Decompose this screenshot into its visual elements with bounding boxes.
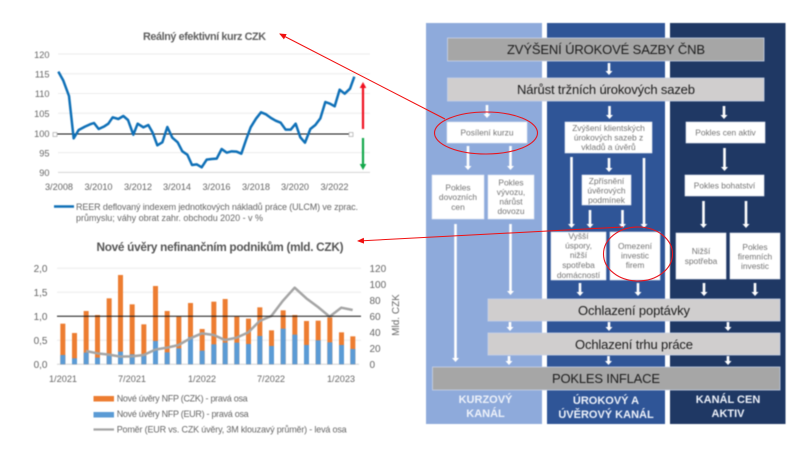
box: demand cooling: [488, 299, 780, 321]
box: policy rate increase: ZVÝŠENÍ ÚROKOVÉ SAZBY ČNB: [507, 42, 705, 57]
gridlines and y axis labels: 90: [39, 168, 50, 178]
box: tighter credit: podmínek: [588, 195, 626, 205]
box: lower consumption: Nižší: [692, 246, 711, 256]
box: labour market cooling: Ochlazení trhu práce: [575, 337, 693, 352]
x axis labels: 3/2012: [124, 182, 152, 192]
box: household savings: domácností: [557, 270, 601, 280]
x axis labels: 3/2010: [84, 182, 113, 192]
box: lower consumption: [676, 233, 726, 279]
box: asset prices: Pokles cen aktiv: [695, 128, 757, 138]
box: market rates growth: Nárůst tržních úrokových sazeb: [517, 82, 695, 97]
label: exchange rate channel: KURZOVÝ: [459, 393, 513, 406]
box: client rates: úrokových sazeb z: [574, 132, 643, 142]
box: client rates: Zvýšení klientských: [572, 123, 645, 133]
gridlines and axis labels: 1,5: [34, 288, 48, 299]
chart: new loans to non-financial corporations: [34, 240, 402, 434]
gridlines and axis labels: 0: [370, 360, 376, 371]
x axis labels: 7/2021: [118, 374, 146, 384]
label: asset channel: KANÁL CEN: [696, 393, 760, 406]
box: asset prices: [686, 122, 765, 143]
box: client rates: vkladů a úvěrů: [581, 142, 636, 152]
up arrow: red: [360, 82, 366, 129]
reference line at 1,0: [57, 315, 361, 317]
box: firm investment: firem: [626, 260, 644, 270]
box: inflation decline: POKLES INFLACE: [552, 371, 660, 386]
box: policy rate increase: [448, 38, 764, 61]
box: household savings: nižší: [570, 250, 588, 260]
box: lower consumption: spotřeba: [685, 256, 718, 266]
down arrow: green: [360, 138, 366, 170]
box: wealth: [685, 175, 764, 196]
arrow: firm investment to loans chart: [358, 227, 623, 241]
box: tighter credit: [582, 175, 631, 205]
box: exports: vývozu,: [497, 187, 525, 197]
gridlines and y axis labels: 95: [39, 148, 50, 158]
panel: asset price channel: [670, 23, 786, 424]
box: household savings: [551, 231, 606, 280]
gridlines and axis labels: 0,0: [34, 360, 48, 371]
blue bars: EUR loans: [60, 329, 355, 364]
x axis labels: 1/2022: [188, 374, 216, 384]
label: interest channel: ÚVĚROVÝ KANÁL: [558, 408, 654, 421]
x axis labels: 7/2022: [257, 374, 285, 384]
callout: ellipse around appreciation: [434, 112, 538, 154]
box: currency appreciation: Posílení kurzu: [460, 128, 514, 138]
grey ratio line: [86, 288, 353, 357]
box: client rates: [565, 122, 652, 153]
box: corporate investment: investic: [741, 261, 769, 271]
gridlines and axis labels: 60: [370, 312, 381, 323]
gridlines and axis labels: Mld. CZK: [391, 294, 402, 336]
box: wealth: Pokles bohatství: [694, 180, 756, 190]
gridlines and y axis labels: 105: [34, 109, 50, 119]
arrow: appreciation to REER chart: [280, 34, 445, 119]
legend: loans: Nové úvěry NFP (EUR) - pravá osa: [117, 409, 249, 419]
box: import prices: dovozních: [439, 192, 477, 202]
baseline at 100: [53, 132, 353, 136]
x axis labels: 3/2018: [242, 182, 270, 192]
box: import prices: Pokles: [445, 182, 471, 192]
box: demand cooling: Ochlazení poptávky: [578, 303, 690, 318]
box: market rates growth: [448, 78, 764, 101]
label: asset channel: AKTIV: [712, 408, 745, 420]
box: exports: dovozu: [497, 206, 525, 216]
box: corporate investment: Pokles: [742, 242, 768, 252]
box: household savings: úspory,: [565, 240, 592, 250]
gridlines and axis labels: 0,5: [34, 336, 48, 347]
gridlines and y axis labels: 120: [34, 50, 50, 60]
box: exports: Pokles: [498, 178, 524, 188]
legend: loans: Poměr (EUR vs. CZK úvěry, 3M klouzavý průměr) - levá osa: [117, 424, 347, 434]
x axis labels: 3/2022: [320, 182, 349, 192]
x axis labels: 3/2008: [45, 182, 73, 192]
panel: exchange rate channel: [426, 23, 542, 424]
gridlines and axis labels: 2,0: [34, 264, 48, 275]
x axis labels: 1/2023: [327, 374, 355, 384]
box: household savings: Vyšší: [568, 231, 589, 241]
label: interest channel: [558, 394, 654, 421]
box: tighter credit: úvěrových: [587, 186, 626, 196]
box: import prices: [432, 175, 484, 219]
x axis labels: 3/2016: [202, 182, 231, 192]
box: exports: nárůst: [499, 196, 523, 206]
gridlines and y axis labels: 115: [35, 70, 50, 80]
box: corporate investment: [730, 233, 780, 279]
gridlines and axis labels: 80: [370, 296, 381, 307]
stacked bars: [60, 275, 355, 364]
box: tighter credit: Zpřísnění: [589, 176, 625, 186]
x axis labels: 3/2020: [281, 182, 309, 192]
x axis labels: [45, 182, 349, 192]
legend: REER: [54, 202, 358, 223]
chart title: REER: Reálný efektivní kurz CZK: [143, 31, 266, 43]
x axis labels: [49, 374, 355, 384]
legend: loans: Nové úvěry NFP (CZK) - pravá osa: [117, 394, 248, 404]
orange bars: CZK loans: [60, 275, 355, 364]
gridlines and axis labels: 1,0: [34, 312, 48, 323]
box: corporate investment: firemních: [738, 252, 773, 262]
box: labour market cooling: [488, 333, 780, 355]
gridlines and axis labels: 100: [370, 280, 387, 291]
diagram: transmission channels: [426, 23, 786, 424]
box: firm investment: investic: [621, 250, 649, 260]
gridlines and axis labels: 40: [370, 328, 381, 339]
gridlines and axis labels: [34, 264, 402, 371]
box: household savings: spotřeba: [562, 260, 595, 270]
gridlines and axis labels: 120: [370, 264, 387, 275]
box: firm investment: [610, 232, 660, 280]
legend: REER: REER deflovaný indexem jednotkových nákladů práce (ULCM) ve zprac.: [76, 202, 358, 212]
chart title: loans: Nové úvěry nefinančním podnikům (mld. CZK): [96, 240, 344, 254]
x axis labels: 1/2021: [49, 374, 77, 384]
gridlines and y axis labels: [34, 50, 370, 178]
gridlines and y axis labels: 100: [34, 129, 50, 139]
box: currency appreciation: [447, 122, 527, 143]
callout: ellipse around firm investment: [604, 227, 672, 281]
gridlines and axis labels: 20: [370, 344, 381, 355]
legend: loans: [94, 394, 347, 434]
label: interest channel: ÚROKOVÝ A: [573, 394, 639, 407]
box: import prices: cen: [451, 202, 465, 212]
REER line: [58, 72, 354, 167]
box: firm investment: Omezení: [618, 241, 653, 251]
gridlines and y axis labels: 110: [35, 89, 50, 99]
panel: interest and credit channel: [547, 23, 665, 424]
arrows: [456, 63, 755, 361]
box: exports: [488, 175, 534, 219]
label: asset channel: [696, 393, 760, 420]
box: inflation decline: [432, 367, 780, 390]
label: exchange rate channel: [459, 393, 513, 420]
x axis labels: 3/2014: [163, 182, 191, 192]
chart: real effective exchange rate: [34, 31, 370, 223]
label: exchange rate channel: KANÁL: [466, 407, 505, 420]
legend: REER: průmyslu; váhy obrat zahr. obchodu 2020 - v %: [76, 213, 263, 223]
